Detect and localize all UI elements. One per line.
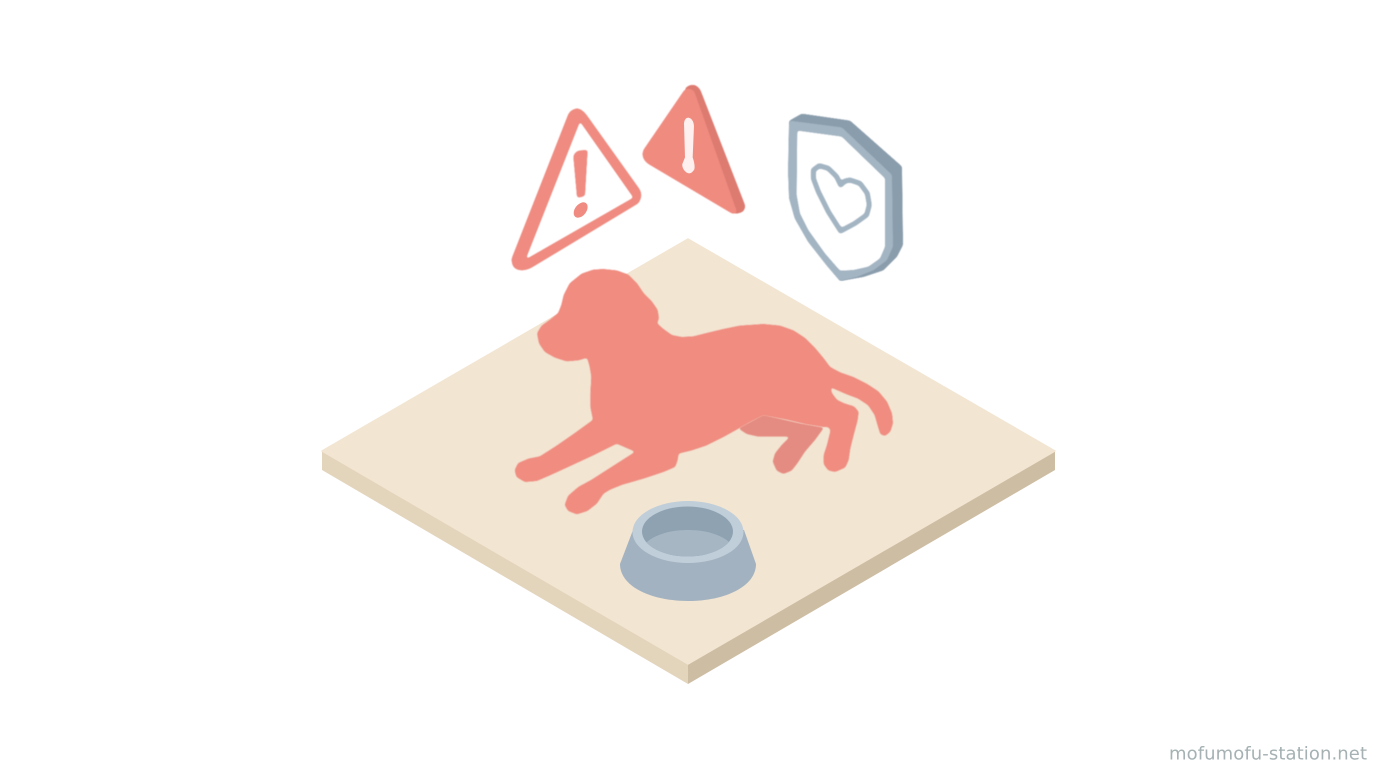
bowl: [620, 501, 756, 601]
dog body: [515, 269, 893, 514]
exclamation mark: [682, 118, 695, 173]
far hind leg: [738, 415, 824, 474]
watermark text: mofumofu-station.net: [1169, 744, 1367, 764]
platform: beige isometric tile: [322, 239, 1055, 684]
icon: solid warning triangle: [643, 85, 745, 214]
shield interior: [797, 131, 885, 271]
triangle face: [643, 89, 737, 214]
bowl rim: [632, 501, 744, 563]
isometric illustration: [321, 84, 1367, 760]
dog silhouette lying down: [515, 269, 893, 514]
icon: outlined warning triangle: [512, 108, 641, 270]
heart outline: [813, 166, 869, 231]
shield side depth: [789, 114, 903, 281]
bowl outer wall: [620, 530, 756, 601]
icon: shield with heart: [788, 114, 903, 281]
bowl interior: [642, 506, 733, 556]
shield front frame: [788, 121, 893, 281]
exclamation mark: [573, 150, 588, 197]
triangle side: [685, 85, 745, 214]
